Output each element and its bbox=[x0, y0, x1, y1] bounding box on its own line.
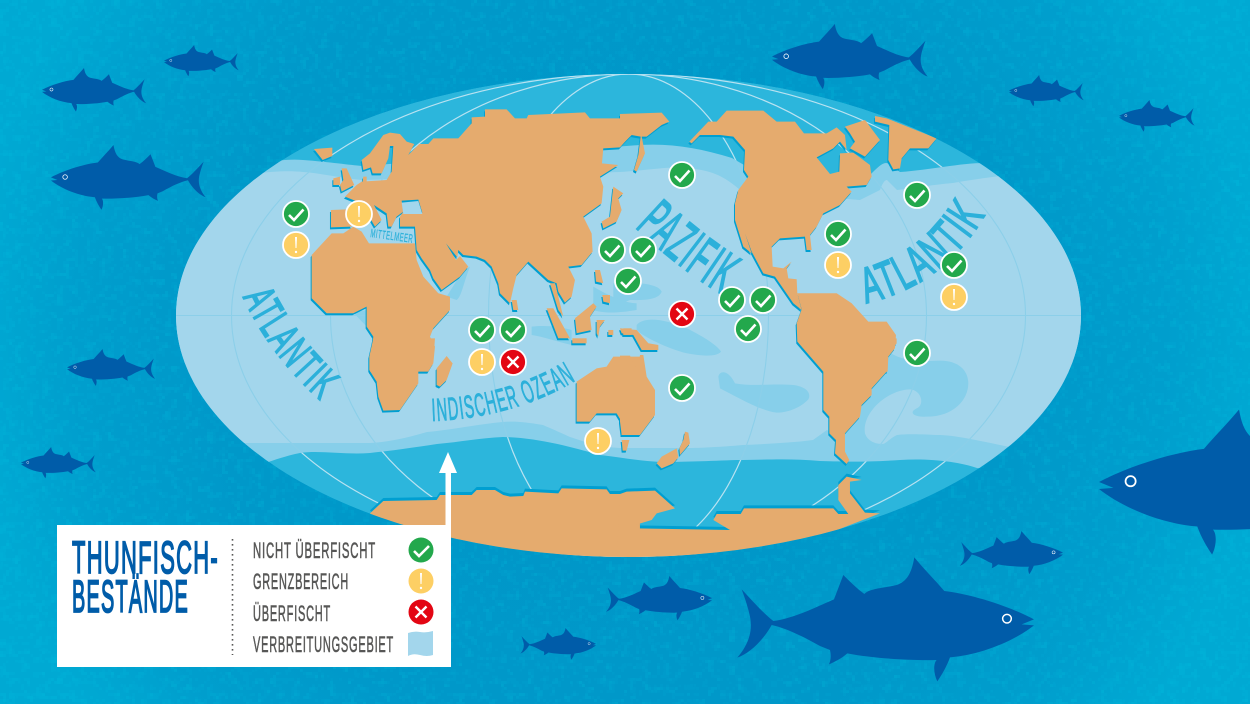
continents bbox=[312, 109, 937, 468]
label: Atlantik east: ATLANTIK bbox=[864, 196, 986, 304]
marker group: Westpazifik bbox=[599, 237, 656, 294]
legend panel: THUNFISCH- bbox=[72, 532, 219, 583]
fish: bottom large bbox=[737, 557, 1034, 681]
Black Sea bbox=[402, 200, 422, 214]
legend: verbreitungsgebiet: VERBREITUNGSGEBIET bbox=[253, 632, 394, 657]
Antarctica bbox=[370, 474, 880, 557]
marker: Südpazifik bbox=[669, 375, 695, 401]
world map bbox=[176, 74, 1081, 557]
fish: far right small bbox=[1119, 100, 1195, 132]
fish: bottom centre bbox=[606, 576, 712, 620]
fish: upper left bbox=[42, 68, 146, 112]
label: Atlantik west: ATLANTIK bbox=[242, 289, 342, 402]
fish: left large bbox=[51, 145, 206, 210]
distribution area bbox=[176, 168, 1081, 448]
fish: right edge cropped bbox=[1099, 409, 1250, 555]
label: Indischer Ozean: INDISCHER OZEAN bbox=[432, 362, 575, 422]
legend: verbreitungsgebiet bbox=[253, 631, 433, 657]
Africa south and Madagascar bbox=[369, 338, 640, 435]
marker group: Westatlantik bbox=[825, 221, 851, 278]
marker group: Ostpazifik bbox=[719, 287, 776, 342]
fish: lower left small bbox=[21, 447, 96, 478]
marker: Zentralpazifik bbox=[669, 301, 695, 327]
meridians and equator bbox=[176, 162, 1081, 462]
marker: Südlich von Australien bbox=[585, 428, 611, 454]
status markers bbox=[283, 162, 967, 454]
marker: Mittelmeer bbox=[346, 201, 372, 227]
fish: top right small bbox=[1009, 75, 1084, 106]
legend: grenzbereich: GRENZBEREICH bbox=[253, 569, 349, 594]
fish: lower right bbox=[960, 531, 1063, 574]
marker group: Indischer Ozean bbox=[469, 317, 526, 375]
label: Mittelmeer: MITTELMEER bbox=[370, 228, 413, 243]
arrow bbox=[439, 452, 457, 530]
polar ocean bbox=[268, 74, 980, 530]
fish: bottom small bbox=[520, 628, 596, 660]
current blobs bbox=[353, 267, 968, 453]
heading: BESTÄNDE bbox=[72, 571, 189, 622]
meridians in polar water bbox=[301, 74, 946, 557]
marker group: Nordatlantik Ost bbox=[283, 201, 309, 258]
heading bbox=[72, 532, 219, 622]
fish: top left small bbox=[164, 45, 239, 76]
marker group: Ostatlantik bbox=[941, 252, 967, 310]
marker: Nordatlantik bbox=[904, 182, 930, 208]
fish: top right large bbox=[772, 24, 928, 89]
Americas and north east Asia bbox=[620, 111, 937, 372]
South America tip, Australia east, New Zealand bbox=[620, 338, 897, 468]
legend: nicht überfischt: NICHT ÜBERFISCHT bbox=[253, 538, 376, 563]
distribution margin bbox=[176, 144, 1081, 468]
legend: überfischt: ÜBERFISCHT bbox=[253, 601, 331, 626]
label: Pazifik: PAZIFIK bbox=[636, 198, 744, 294]
marker: Nordpazifik bbox=[669, 162, 695, 188]
Eurasia and islands bbox=[312, 109, 632, 372]
marker: Südatlantik bbox=[904, 340, 930, 366]
fish: left middle bbox=[67, 349, 155, 386]
legend panel bbox=[57, 525, 451, 667]
